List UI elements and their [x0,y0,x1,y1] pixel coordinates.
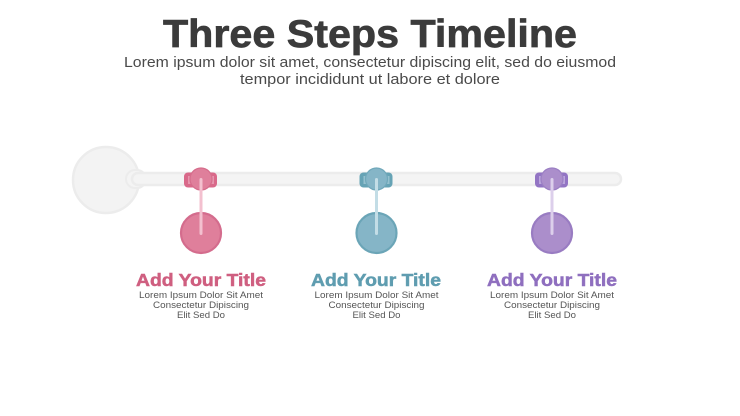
step 3 text: Consectetur Dipiscing [504,300,600,311]
step 2 connector [356,168,396,253]
subtitle [124,54,616,88]
step 3 connector [532,168,572,253]
step 2 text: Lorem Ipsum Dolor Sit Amet [314,290,439,301]
step 3 text: Elit Sed Do [528,310,576,321]
subtitle: Lorem ipsum dolor sit amet, consectetur dipiscing elit, sed do eiusmod [124,54,616,71]
step 1 connector [181,168,221,253]
step 1 text: Consectetur Dipiscing [153,300,249,311]
step 1 text: Add Your Title [136,270,266,290]
step 1 text [136,270,266,321]
timeline track [73,147,621,213]
step 1 text: Lorem Ipsum Dolor Sit Amet [139,290,263,301]
step 3 text: Lorem Ipsum Dolor Sit Amet [490,290,614,301]
subtitle: tempor incididunt ut labore et dolore [240,71,500,88]
step 2 text: Consectetur Dipiscing [328,300,424,311]
step 2 text [311,270,441,321]
step 2 text: Add Your Title [311,270,441,290]
step 3 text [487,270,617,321]
step 3 text: Add Your Title [487,270,617,290]
step 2 text: Elit Sed Do [352,310,400,321]
title: Three Steps Timeline [163,13,577,56]
step 1 text: Elit Sed Do [177,310,225,321]
